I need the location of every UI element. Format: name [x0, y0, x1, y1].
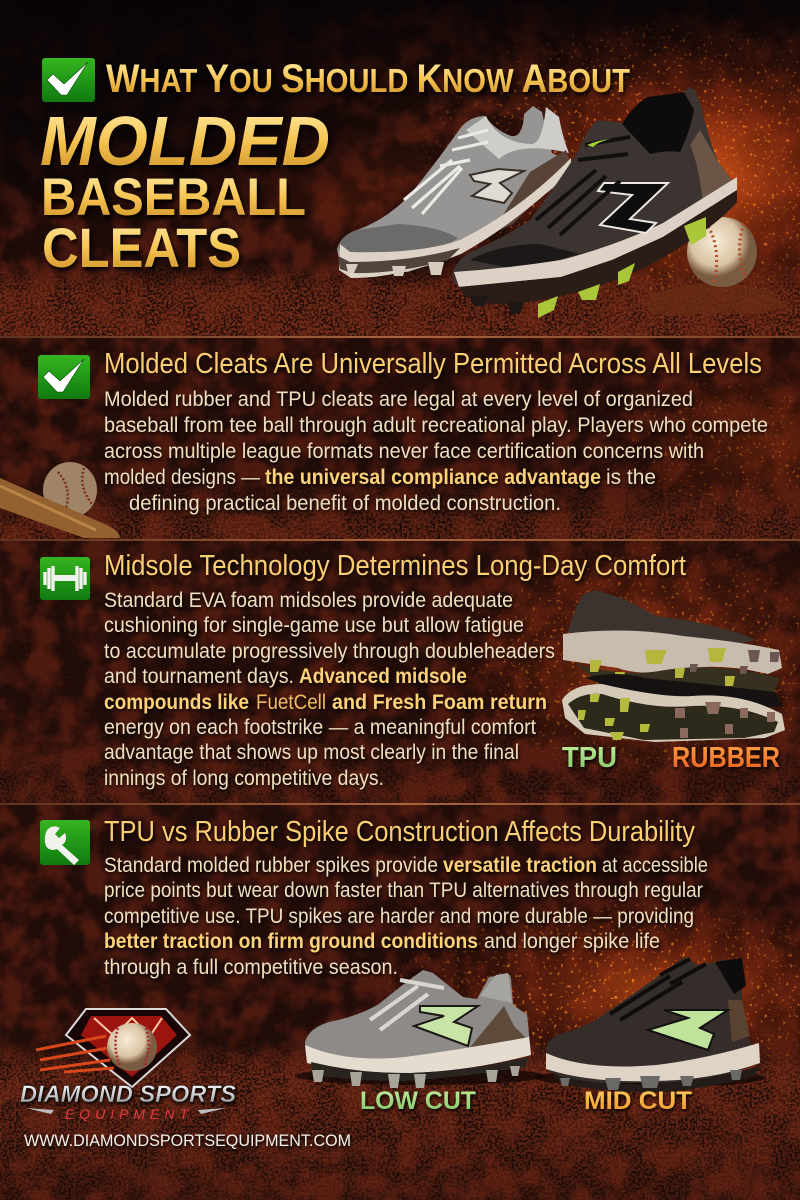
title: cleats: CLEATS — [42, 216, 241, 279]
label: RUBBER: RUBBER — [672, 742, 780, 774]
icon: wrench — [40, 820, 90, 865]
label: mid cut: MID CUT — [584, 1087, 692, 1115]
icon: green check — [42, 58, 95, 102]
body text: defining practical benefit of molded construction. — [129, 492, 561, 515]
website url: WWW.DIAMONDSPORTSEQUIPMENT.COM — [24, 1132, 351, 1150]
logo tagline: EQUIPMENT — [65, 1106, 189, 1122]
body text: and longer spike life — [484, 930, 660, 953]
title: baseball: BASEBALL — [41, 168, 306, 227]
body text: versatile traction — [443, 854, 597, 877]
title: what you should know about: WHAT YOU SHOULD KNOW ABOUT — [106, 57, 630, 101]
illustration: cleat soles comparison — [562, 590, 785, 742]
body text — [104, 388, 768, 515]
logo: diamond sports equipment — [20, 1009, 236, 1122]
body text: competitive use. TPU spikes are harder and more durable — providing — [104, 905, 694, 928]
body text: cushioning for single-game use but allow fatigue — [104, 614, 524, 637]
body text: and Fresh Foam return — [332, 691, 547, 714]
body text: is the — [606, 466, 656, 489]
illustration: black cleat — [452, 88, 737, 318]
body text: energy on each footstrike — a meaningful comfort — [104, 716, 536, 739]
illustration: baseball behind cleats — [650, 217, 788, 314]
panel: TPU vs rubber — [20, 816, 765, 1150]
body text: compounds like — [104, 691, 249, 714]
body text: across multiple league formats never face certification concerns with — [104, 440, 704, 463]
body text: Standard molded rubber spikes provide — [104, 854, 438, 877]
body text: better traction on firm ground conditions — [104, 930, 478, 953]
body text: advantage that shows up most clearly in the final — [104, 741, 519, 764]
body text — [104, 589, 555, 790]
logo wordmark: DIAMOND SPORTS — [20, 1081, 236, 1108]
body text: baseball from tee ball through adult recreational play. Players who compete — [104, 414, 768, 437]
heading: TPU vs Rubber Spike Construction Affects Durability — [104, 816, 695, 848]
title: molded: MOLDED — [40, 102, 330, 180]
body text: molded designs — — [104, 466, 260, 489]
illustration: bat and ball — [0, 462, 120, 538]
body text: to accumulate progressively through doubleheaders — [104, 640, 555, 663]
panel: hero header — [40, 57, 788, 318]
illustration: mid cut cleat — [535, 957, 765, 1092]
body text: FuetCell — [256, 691, 326, 714]
body text: the universal compliance advantage — [265, 466, 601, 489]
body text: at accessible — [602, 854, 708, 877]
icon: dumbbell — [40, 557, 90, 600]
illustration: grey cleat — [337, 106, 572, 278]
body text — [104, 854, 708, 979]
body text: innings of long competitive days. — [104, 767, 384, 790]
panel: midsole technology — [40, 550, 785, 790]
body text: through a full competitive season. — [104, 956, 398, 979]
body text: Advanced midsole — [299, 665, 467, 688]
icon: green check — [38, 355, 90, 399]
body text: and tournament days. — [104, 665, 294, 688]
label: low cut: LOW CUT — [360, 1087, 476, 1115]
body text: price points but wear down faster than TPU alternatives through regular — [104, 879, 703, 902]
body text: Molded rubber and TPU cleats are legal at every level of organized — [104, 388, 693, 411]
body text: Standard EVA foam midsoles provide adequate — [104, 589, 513, 612]
heading: Midsole Technology Determines Long-Day Comfort — [104, 550, 686, 582]
label: TPU: TPU — [562, 742, 617, 774]
illustration: low cut cleat — [295, 970, 545, 1088]
panel: universally permitted — [0, 348, 768, 538]
